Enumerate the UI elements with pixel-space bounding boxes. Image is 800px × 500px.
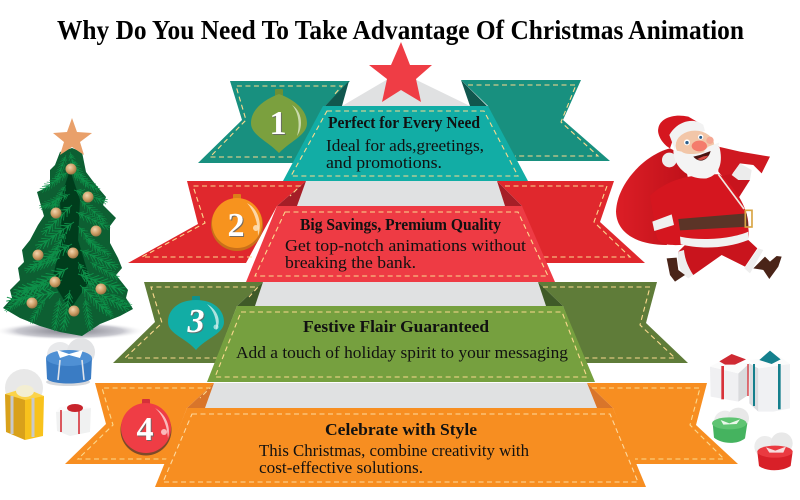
- icon: ornament 4: 4: [136, 411, 154, 448]
- text: tier 3: Add a touch of holiday spirit to your messaging: [236, 343, 569, 362]
- gift: blue round: [46, 338, 95, 386]
- baubles: [26, 164, 106, 316]
- icon: ornament 2: [211, 194, 263, 251]
- gift: small white box: [56, 404, 91, 436]
- pyramid background: [205, 72, 597, 408]
- ribbon tails: [113, 282, 688, 363]
- text: tier 3: [236, 317, 569, 362]
- icon: ornament 4: [120, 399, 172, 456]
- text: tier 4: Celebrate with Style: [325, 420, 477, 439]
- ribbon front: [207, 306, 595, 382]
- text: tier 4: cost-effective solutions.: [259, 458, 423, 477]
- text: tier 1: [326, 113, 484, 172]
- ribbon tails: [65, 383, 738, 464]
- illustration: Christmas tree: [0, 118, 146, 340]
- ribbon tails: [198, 80, 610, 163]
- ribbon front: [283, 106, 528, 181]
- panel: tier 3 green ribbon: [113, 282, 688, 382]
- icon: ornament 1: [251, 89, 307, 153]
- gift: red round: [754, 432, 793, 470]
- title: Why Do You Need To Take Advantage Of Christmas Animation: [57, 15, 744, 45]
- panel: tier 4 orange ribbon: [65, 383, 738, 487]
- gift: yellow box: [5, 369, 44, 440]
- illustration: gifts left: [5, 338, 95, 440]
- illustration: Santa Claus: [616, 116, 782, 282]
- icon: ornament 3: [168, 296, 224, 350]
- text: tier 2: Big Savings, Premium Quality: [300, 215, 501, 234]
- text: tier 1: Ideal for ads,greetings,: [326, 136, 484, 155]
- text: tier 2: Get top-notch animations without: [285, 236, 526, 255]
- gift: white box red ribbon: [710, 354, 749, 402]
- ribbon tails: [128, 181, 645, 263]
- text: tier 4: [259, 420, 529, 477]
- gift: white box teal ribbon: [749, 351, 790, 412]
- icon: ornament 3: 3: [186, 303, 204, 340]
- icon: ornament 1: 1: [270, 105, 286, 142]
- text: tier 4: This Christmas, combine creativity with: [259, 441, 529, 460]
- illustration: gifts right: [710, 351, 793, 470]
- text: tier 3: Festive Flair Guaranteed: [303, 317, 490, 336]
- text: tier 2: [285, 215, 526, 272]
- panel: tier 2 red ribbon: [128, 181, 645, 282]
- ribbon front: [246, 206, 555, 282]
- tree star: [53, 118, 92, 155]
- icon: star: [369, 42, 432, 102]
- ribbon front: [155, 408, 646, 487]
- text: tier 2: breaking the bank.: [285, 253, 416, 272]
- panel: tier 1 teal ribbon: [198, 80, 610, 181]
- icon: ornament 2: 2: [228, 207, 244, 244]
- gift: green round: [712, 408, 749, 443]
- text: tier 1: Perfect for Every Need: [328, 113, 480, 132]
- text: tier 1: and promotions.: [326, 153, 442, 172]
